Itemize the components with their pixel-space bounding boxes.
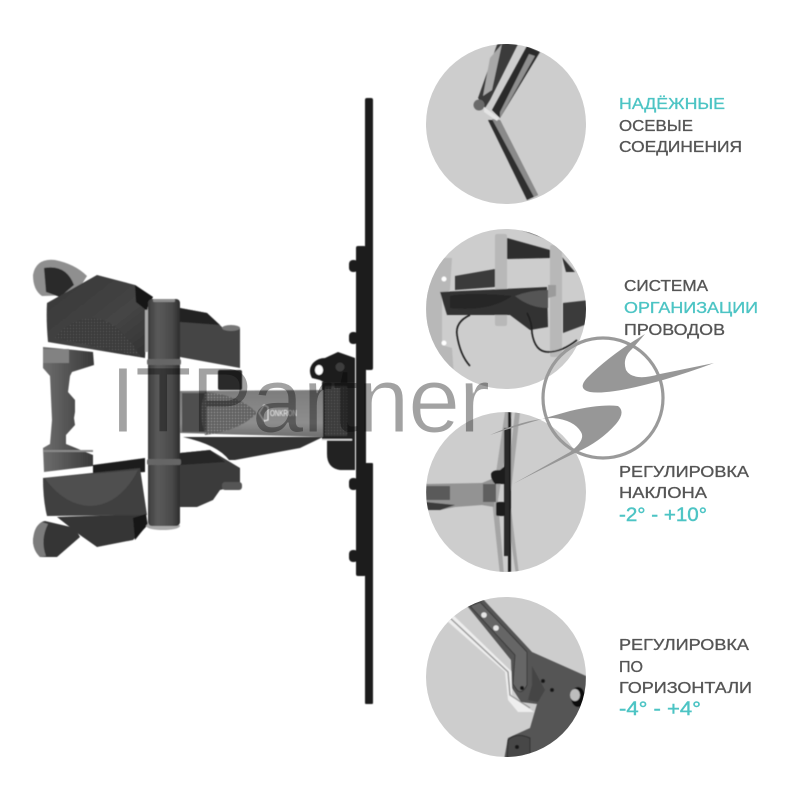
detail circle: cable management [426, 228, 590, 392]
caption: axial joints: ОСЕВЫЕ [619, 118, 693, 135]
lower long arm [33, 450, 242, 557]
detail circle: swivel adjustment [426, 597, 590, 760]
folding bracket [43, 347, 242, 472]
logo: ONKRON [270, 408, 297, 418]
caption: tilt adjustment [619, 464, 750, 526]
caption: cable management: СИСТЕМА [624, 278, 709, 295]
watermark: ITPartner: ITPartner [110, 348, 490, 452]
tv wall mount photo [33, 98, 373, 704]
caption: cable management: ОРГАНИЗАЦИИ [624, 300, 758, 317]
caption: tilt adjustment: НАКЛОНА [619, 485, 708, 502]
upper long arm [33, 260, 240, 368]
caption: swivel adjustment: ГОРИЗОНТАЛИ [619, 680, 752, 697]
wall plate and rails [349, 98, 373, 704]
caption: cable management: ПРОВОДОВ [624, 322, 725, 339]
caption: tilt adjustment: РЕГУЛИРОВКА [619, 464, 750, 481]
main swing arm [180, 390, 323, 460]
caption: swivel adjustment: РЕГУЛИРОВКА [619, 637, 750, 654]
detail circle: tilt adjustment [426, 412, 586, 575]
caption: axial joints: СОЕДИНЕНИЯ [619, 139, 742, 156]
central pillar [145, 299, 181, 530]
watermark: swoosh logo [490, 334, 714, 484]
tilt bracket [310, 352, 355, 470]
caption: swivel adjustment [619, 637, 752, 720]
logo [259, 405, 297, 421]
caption: cable management [624, 278, 758, 339]
caption: axial joints [619, 96, 742, 156]
caption: tilt adjustment: -2° - +10° [619, 505, 707, 526]
caption: swivel adjustment: ПО [619, 659, 643, 676]
caption: swivel adjustment: -4° - +4° [619, 699, 701, 720]
detail circle: axial joints [426, 42, 586, 204]
caption: axial joints: НАДЁЖНЫЕ [619, 96, 725, 113]
